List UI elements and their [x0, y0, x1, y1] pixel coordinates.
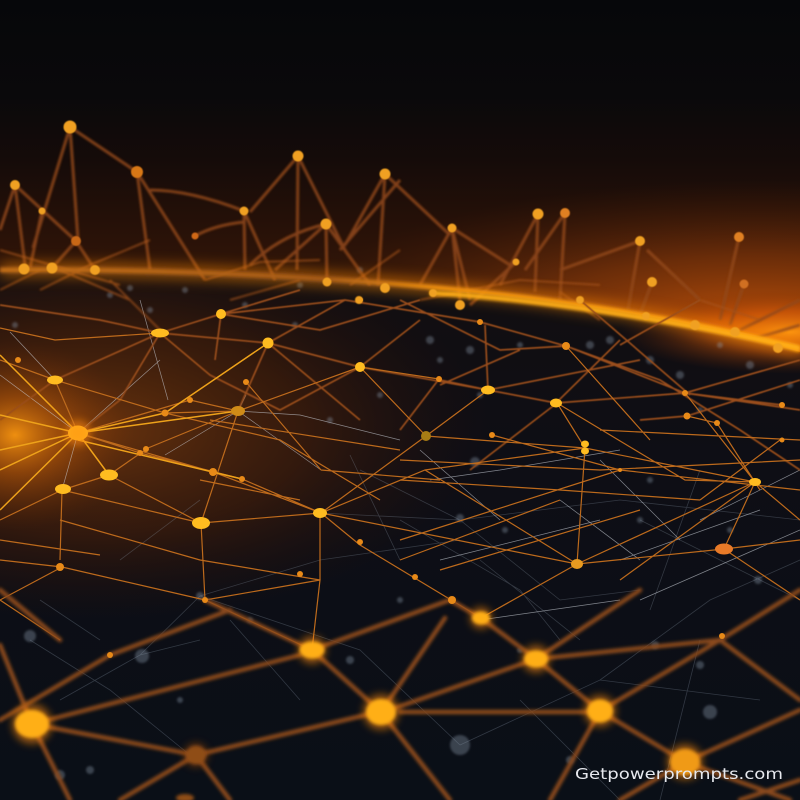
- near-horizon lines: [0, 240, 760, 330]
- blurred grey bokeh dots: [12, 267, 793, 780]
- bright rim segment: [430, 293, 800, 348]
- bright thin wire lines: [0, 300, 800, 620]
- spikes above the horizon: [0, 127, 800, 340]
- foreground orange network lines: [0, 590, 800, 800]
- horizon rim light: [0, 270, 800, 350]
- globe surface: [0, 271, 800, 800]
- bright yellow lines in left glow: [0, 343, 268, 510]
- mid orange network lines: [0, 328, 800, 650]
- far orange network lines: [0, 290, 800, 470]
- horizon rim light glow: [0, 270, 800, 350]
- faint grey network: [30, 455, 800, 800]
- foreground node cores: [15, 612, 700, 800]
- small orange dots: [15, 297, 785, 658]
- foreground node halos: [12, 420, 703, 780]
- left orange glow: [0, 340, 135, 530]
- spike tip nodes: [10, 120, 783, 353]
- mid-field network nodes: [47, 309, 761, 569]
- brown left haze: [0, 240, 490, 620]
- right horizon glow: [620, 290, 800, 374]
- orange sky tint: [280, 180, 800, 480]
- watermark: Getpowerprompts.com: [575, 765, 783, 783]
